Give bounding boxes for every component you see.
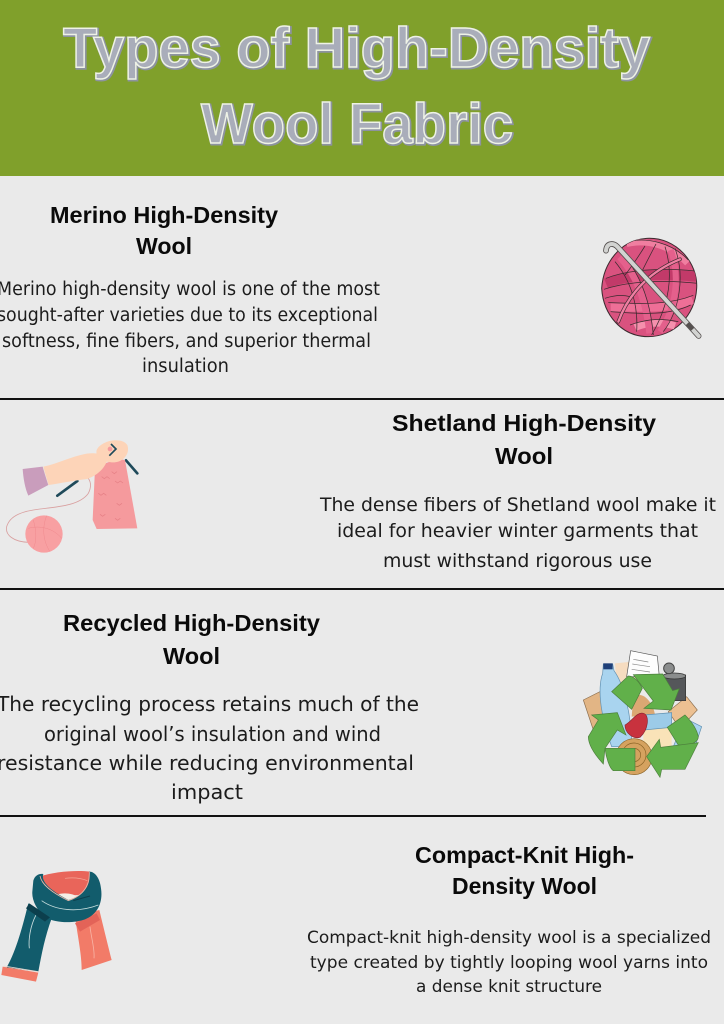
heading: Recycled [63, 610, 320, 669]
text: Compact-Knit description: Compact-knit high-density wool is a specialized [307, 928, 711, 947]
heading: Compact-Knit: Compact-Knit High- [415, 842, 634, 868]
text: Compact-Knit description [307, 928, 711, 996]
heading: Merino: Wool [136, 233, 192, 259]
text: Merino description: Merino high-density wool is one of the most [0, 279, 380, 300]
header banner [0, 0, 724, 176]
icon: yarn ball with crochet hook [602, 238, 699, 337]
title: Wool Fabric [201, 92, 513, 156]
heading: Merino: Merino High-Density [50, 202, 278, 228]
text: Merino description: sought-after varieties due to its exceptional [0, 305, 378, 326]
heading: Recycled: Recycled High-Density [63, 610, 320, 636]
title: Types of High-Density [63, 16, 650, 80]
title: Types of High-Density [64, 17, 651, 81]
panel: Compact-Knit [1, 842, 711, 996]
icon: recycling symbol over waste [583, 651, 702, 777]
icon: hands knitting [6, 440, 137, 553]
heading: Shetland [392, 410, 656, 469]
text: Shetland description: ideal for heavier winter garments that [337, 520, 698, 542]
divider [0, 588, 724, 590]
text: Recycled description: original wool’s insulation and wind [44, 722, 381, 746]
heading: Recycled: Wool [163, 643, 220, 669]
heading: Merino [50, 202, 278, 259]
text: Recycled description: impact [171, 780, 243, 804]
text: Merino description [0, 279, 380, 377]
divider [0, 398, 724, 400]
heading: Shetland: Shetland High-Density [392, 410, 656, 436]
panel: Shetland [6, 410, 716, 572]
text: Shetland description: must withstand rigorous use [383, 550, 652, 572]
text: Merino description: softness, fine fibers, and superior thermal [2, 331, 371, 352]
text: Recycled description: The recycling process retains much of the [0, 692, 419, 716]
text: Recycled description: resistance while reducing environmental [0, 751, 414, 775]
text: Compact-Knit description: type created by tightly looping wool yarns into [310, 953, 708, 972]
divider [0, 815, 706, 817]
title: Wool Fabric [202, 93, 514, 157]
icon: scarf [1, 871, 112, 982]
text: Merino description: insulation [142, 356, 229, 377]
heading: Shetland: Wool [495, 443, 553, 469]
text: Shetland description: The dense fibers of Shetland wool make it [319, 494, 716, 516]
title [63, 16, 651, 157]
panel: Merino [0, 202, 699, 377]
heading: Compact-Knit: Density Wool [452, 873, 597, 899]
panel: Recycled [0, 610, 702, 804]
heading: Compact-Knit [415, 842, 634, 899]
text: Compact-Knit description: a dense knit structure [416, 977, 602, 996]
text: Recycled description [0, 692, 419, 804]
text: Shetland description [319, 494, 716, 572]
